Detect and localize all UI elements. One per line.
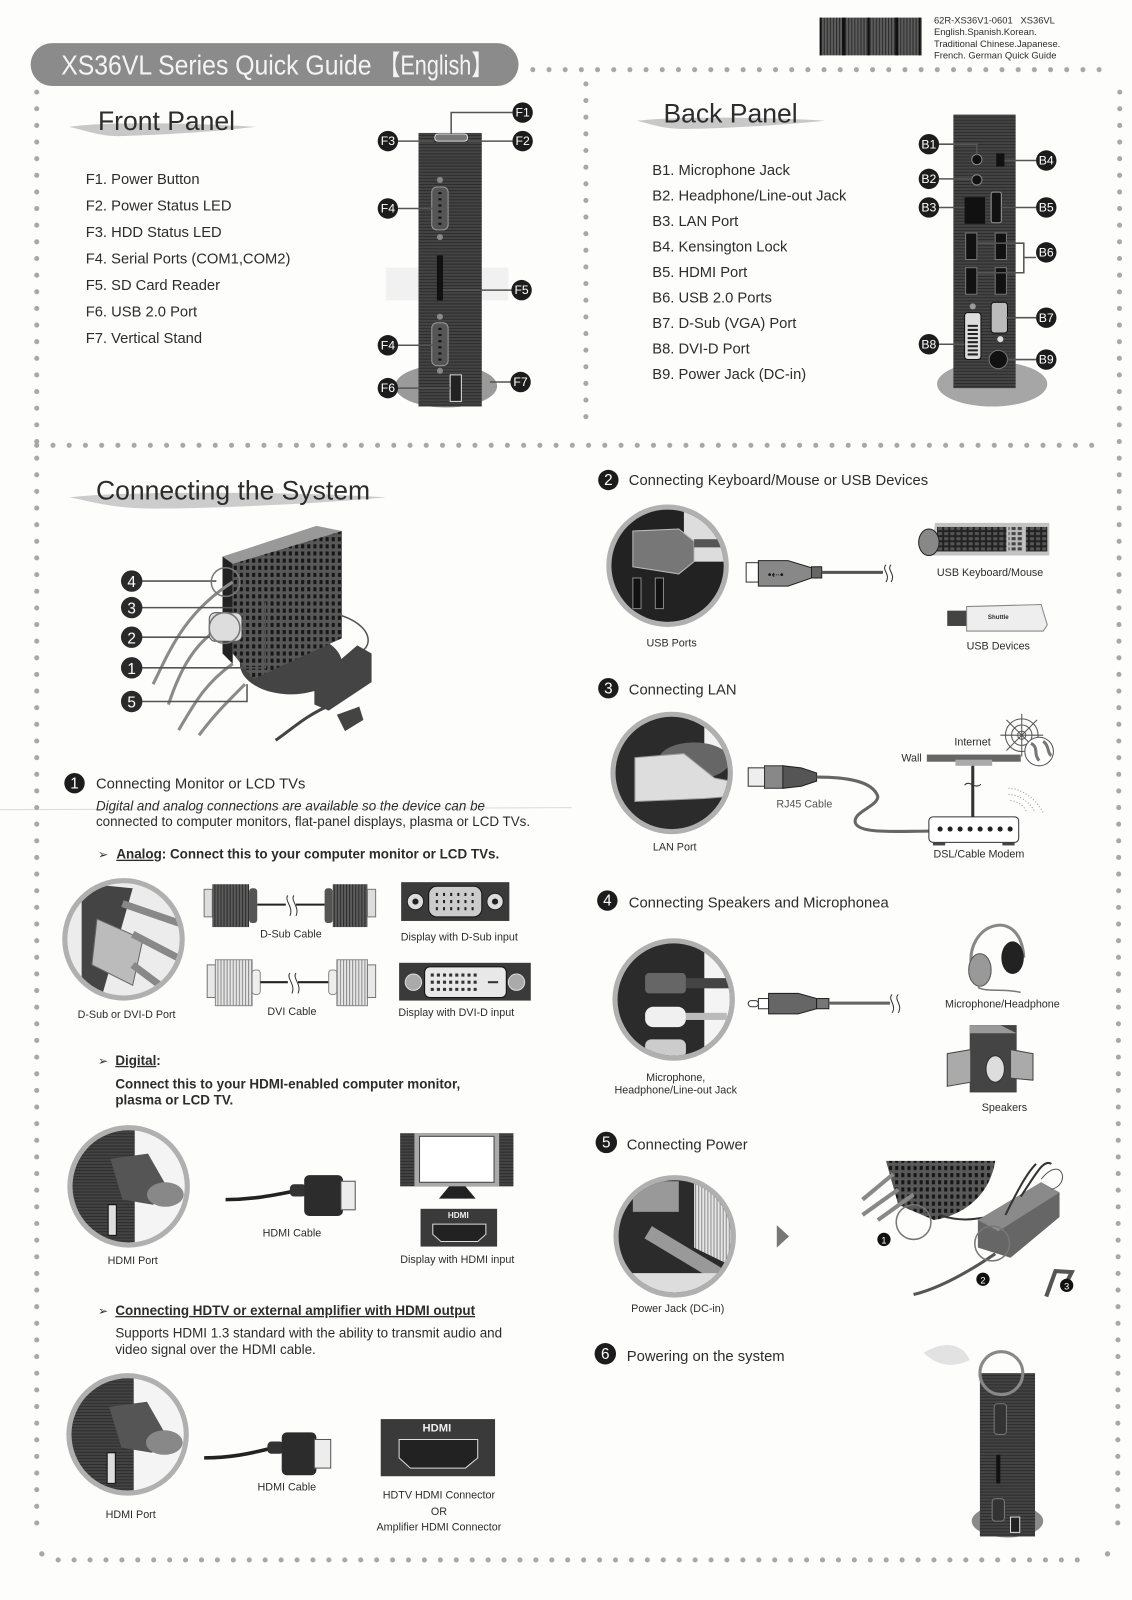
speakers photo [947, 1025, 1033, 1092]
section 1: connecting monitor: D-Sub or DVI-D Port [78, 1009, 176, 1021]
photo: USB ports [606, 504, 729, 627]
section 5 heading: 5 [602, 1135, 611, 1152]
arrow [777, 1225, 789, 1248]
front panel parts list: F2. Power Status LED [86, 199, 232, 215]
section 1 description [96, 799, 530, 829]
section 5 heading: Connecting Power [627, 1138, 748, 1154]
RJ45 cable drawing [748, 766, 929, 832]
badges: front: F1 [515, 106, 530, 120]
front panel parts list: F4. Serial Ports (COM1,COM2) [86, 252, 290, 268]
badges: front: F5 [514, 283, 529, 297]
front panel parts list: F7. Vertical Stand [86, 331, 202, 347]
DVI cable drawing [207, 960, 376, 1006]
D-Sub cable drawing [204, 884, 376, 927]
overview callouts: 1 [127, 661, 136, 678]
section 6: powering on [595, 1343, 1043, 1537]
section 5: power [596, 1132, 1073, 1315]
front panel device photo [395, 133, 497, 408]
badges: back: B1 [921, 137, 937, 151]
front panel parts list: F5. SD Card Reader [86, 278, 220, 294]
section 3: LAN [598, 678, 1053, 861]
HDMI connector photo [381, 1419, 495, 1476]
section 6 heading [595, 1343, 785, 1365]
back panel parts list: B1. Microphone Jack [652, 163, 790, 179]
back panel parts list: B2. Headphone/Line-out Jack [652, 188, 847, 204]
badges: back: B7 [1039, 311, 1054, 325]
system overview illustration [121, 526, 372, 740]
analog heading: Analog: Connect this to your computer monitor or LCD TVs. [116, 847, 499, 862]
badges: back: B8 [921, 337, 937, 351]
wall and internet diagram: Wall [901, 753, 922, 765]
section 1 description: Digital and analog connections are available so the device can be [96, 799, 485, 814]
section 2: keyboard, mouse, USB [598, 470, 1049, 652]
HDTV heading: ➢ [98, 1304, 108, 1318]
badges: back: B5 [1039, 201, 1054, 215]
section 4 heading: 4 [603, 893, 612, 910]
section 1: connecting monitor: DVI Cable [267, 1006, 316, 1018]
badges: front: F6 [381, 381, 395, 395]
overview callouts: 5 [127, 695, 136, 712]
D-Sub display connector [401, 882, 509, 921]
headset photo [969, 925, 1024, 992]
digital subsection: Display with HDMI input [400, 1254, 514, 1266]
front panel parts list: F6. USB 2.0 Port [86, 305, 197, 321]
HDTV description: video signal over the HDMI cable. [115, 1342, 316, 1357]
digital subsection: HDMI Cable [263, 1227, 321, 1239]
audio jack caption: Headphone/Line-out Jack [614, 1084, 738, 1096]
section 4 heading: Connecting Speakers and Microphonea [629, 896, 889, 912]
section 4: speakers and microphone: Microphone/Headphone [945, 999, 1060, 1011]
badges: front [378, 102, 533, 398]
HDMI cable photo [226, 1175, 355, 1216]
back panel parts list: B3. LAN Port [652, 214, 738, 230]
front panel parts list [86, 172, 290, 347]
back panel device photo [937, 115, 1047, 407]
digital heading: ➢ [98, 1054, 108, 1068]
section 2: keyboard, mouse, USB: USB Keyboard/Mouse [937, 567, 1043, 579]
overview callouts: 4 [127, 574, 136, 591]
monitor drawing [400, 1133, 513, 1199]
digital heading [98, 1053, 460, 1108]
HDMI cable photo 2 [204, 1432, 331, 1475]
section 2 heading: 2 [604, 472, 613, 489]
back panel parts list: B5. HDMI Port [652, 265, 747, 281]
USB stick photo [947, 605, 1047, 631]
badges: front: F4 [381, 202, 395, 216]
barcode caption: Traditional Chinese.Japanese. [934, 38, 1060, 49]
back panel parts list: B7. D-Sub (VGA) Port [652, 316, 796, 332]
HDTV / amplifier subsection: HDMI Cable [258, 1482, 316, 1494]
HDTV / amplifier subsection [66, 1303, 502, 1533]
overview callouts: 2 [127, 630, 136, 647]
power step badges: 1 [881, 1236, 887, 1246]
badges: back [919, 134, 1056, 370]
section 5 heading [596, 1132, 748, 1154]
wall and internet diagram [901, 714, 1053, 817]
section 1: connecting monitor [61, 773, 531, 1021]
heading: connecting the system: Connecting the System [96, 475, 370, 505]
photo: HDMI port [67, 1125, 190, 1248]
audio jack caption [614, 1072, 738, 1096]
connector caption: Amplifier HDMI Connector [376, 1521, 502, 1533]
digital heading: Connect this to your HDMI-enabled computer monitor, [115, 1076, 460, 1091]
title banner [31, 43, 519, 86]
section 1 heading: Connecting Monitor or LCD TVs [96, 776, 305, 792]
badges: back: B4 [1039, 154, 1054, 168]
section 1 heading [64, 773, 305, 793]
barcode [820, 18, 922, 55]
digital heading: plasma or LCD TV. [115, 1093, 233, 1108]
HDTV / amplifier subsection: HDMI Port [106, 1509, 156, 1521]
panel: front panel [69, 102, 533, 408]
section 1: connecting monitor: D-Sub Cable [260, 928, 322, 940]
callout lines: front [398, 113, 512, 388]
section 1: connecting monitor: Display with DVI-D input [398, 1007, 514, 1019]
USB cable drawing: •⇠• [768, 570, 784, 581]
overview callouts [121, 568, 265, 712]
badges: front: F7 [513, 375, 528, 389]
section 1: connecting monitor: Display with D-Sub input [401, 931, 518, 943]
HDMI display connector [421, 1209, 497, 1247]
badges: back: B6 [1039, 245, 1054, 259]
device with power button highlight [924, 1345, 1043, 1537]
HDMI connector photo: HDMI [423, 1422, 451, 1434]
section 3: LAN: DSL/Cable Modem [933, 849, 1024, 861]
wall and internet diagram: Internet [954, 736, 991, 748]
badges: back: B2 [921, 172, 937, 186]
power step badges [877, 1233, 1073, 1292]
section 2: keyboard, mouse, USB: USB Devices [967, 640, 1030, 652]
digital subsection: HDMI Port [108, 1255, 158, 1267]
USB cable drawing [746, 561, 893, 586]
heading: back panel: Back Panel [663, 99, 798, 129]
front panel parts list: F3. HDD Status LED [86, 225, 222, 241]
section 3 heading: 3 [604, 680, 613, 697]
back panel parts list: B8. DVI-D Port [652, 341, 750, 357]
section 4 heading [597, 890, 889, 912]
badges: back: B9 [1039, 353, 1054, 367]
power step badges: 2 [980, 1275, 986, 1285]
connector caption: HDTV HDMI Connector [383, 1490, 495, 1502]
badges: front: F2 [515, 134, 530, 148]
connector caption [376, 1490, 502, 1533]
section 6 heading: 6 [601, 1346, 610, 1363]
photo: HDMI port 2 [66, 1373, 189, 1496]
HDTV heading: Connecting HDTV or external amplifier with HDMI output [115, 1303, 476, 1318]
callout lines: back [939, 144, 1036, 360]
section 5: power: Power Jack (DC-in) [631, 1303, 724, 1315]
photo: D-Sub or DVI-D port [61, 878, 189, 1001]
section 6 heading: Powering on the system [627, 1349, 785, 1365]
section 4: speakers and microphone: Speakers [982, 1102, 1027, 1114]
analog heading: ➢ [98, 848, 108, 862]
keyboard and mouse photo [919, 523, 1049, 556]
DVI display connector [399, 963, 531, 1001]
badges: front: F4 [381, 338, 395, 352]
digital heading: Digital: [115, 1053, 161, 1068]
title banner: XS36VL Series Quick Guide [61, 49, 372, 80]
digital subsection [67, 1053, 514, 1267]
front panel parts list: F1. Power Button [86, 172, 200, 188]
connector caption: OR [431, 1506, 447, 1518]
back panel parts list: B4. Kensington Lock [652, 239, 788, 255]
power connection photo [863, 1161, 1073, 1297]
photo: power jack [613, 1175, 736, 1298]
barcode caption: French. German Quick Guide [934, 49, 1056, 60]
back panel parts list: B9. Power Jack (DC-in) [652, 367, 806, 383]
section 3 heading: Connecting LAN [629, 682, 737, 698]
section 4: speakers and microphone [597, 890, 1060, 1114]
section 3: LAN: RJ45 Cable [776, 799, 832, 811]
HDTV description [115, 1325, 502, 1357]
section 3 heading [598, 678, 737, 698]
section 1 heading: 1 [70, 775, 79, 792]
heading: front panel: Front Panel [98, 106, 235, 136]
back panel parts list [652, 163, 847, 383]
barcode caption: English.Spanish.Korean. [934, 26, 1037, 37]
section 2 heading: Connecting Keyboard/Mouse or USB Devices [629, 473, 928, 489]
USB stick photo: Shuttle [988, 614, 1009, 621]
section 1 description: connected to computer monitors, flat-panel displays, plasma or LCD TVs. [96, 814, 530, 829]
HDMI display connector: HDMI [448, 1211, 469, 1220]
audio cable drawing [748, 993, 900, 1014]
badges: back: B3 [921, 201, 937, 215]
barcode caption: 62R-XS36V1-0601 XS36VL [934, 15, 1055, 26]
HDTV description: Supports HDMI 1.3 standard with the ability to transmit audio and [115, 1325, 502, 1340]
barcode caption [934, 15, 1060, 60]
panel: back panel [637, 99, 1056, 407]
title banner: 【English】 [379, 49, 493, 80]
section 3: LAN: LAN Port [653, 842, 697, 854]
section 2: keyboard, mouse, USB: USB Ports [647, 637, 697, 649]
power step badges: 3 [1064, 1281, 1069, 1291]
modem drawing [929, 788, 1043, 845]
photo: audio jacks [612, 938, 735, 1061]
audio jack caption: Microphone, [646, 1072, 705, 1084]
photo: LAN port [610, 712, 733, 834]
overview callouts: 3 [127, 601, 136, 618]
back panel parts list: B6. USB 2.0 Ports [652, 290, 772, 306]
badges: front: F3 [381, 134, 395, 148]
